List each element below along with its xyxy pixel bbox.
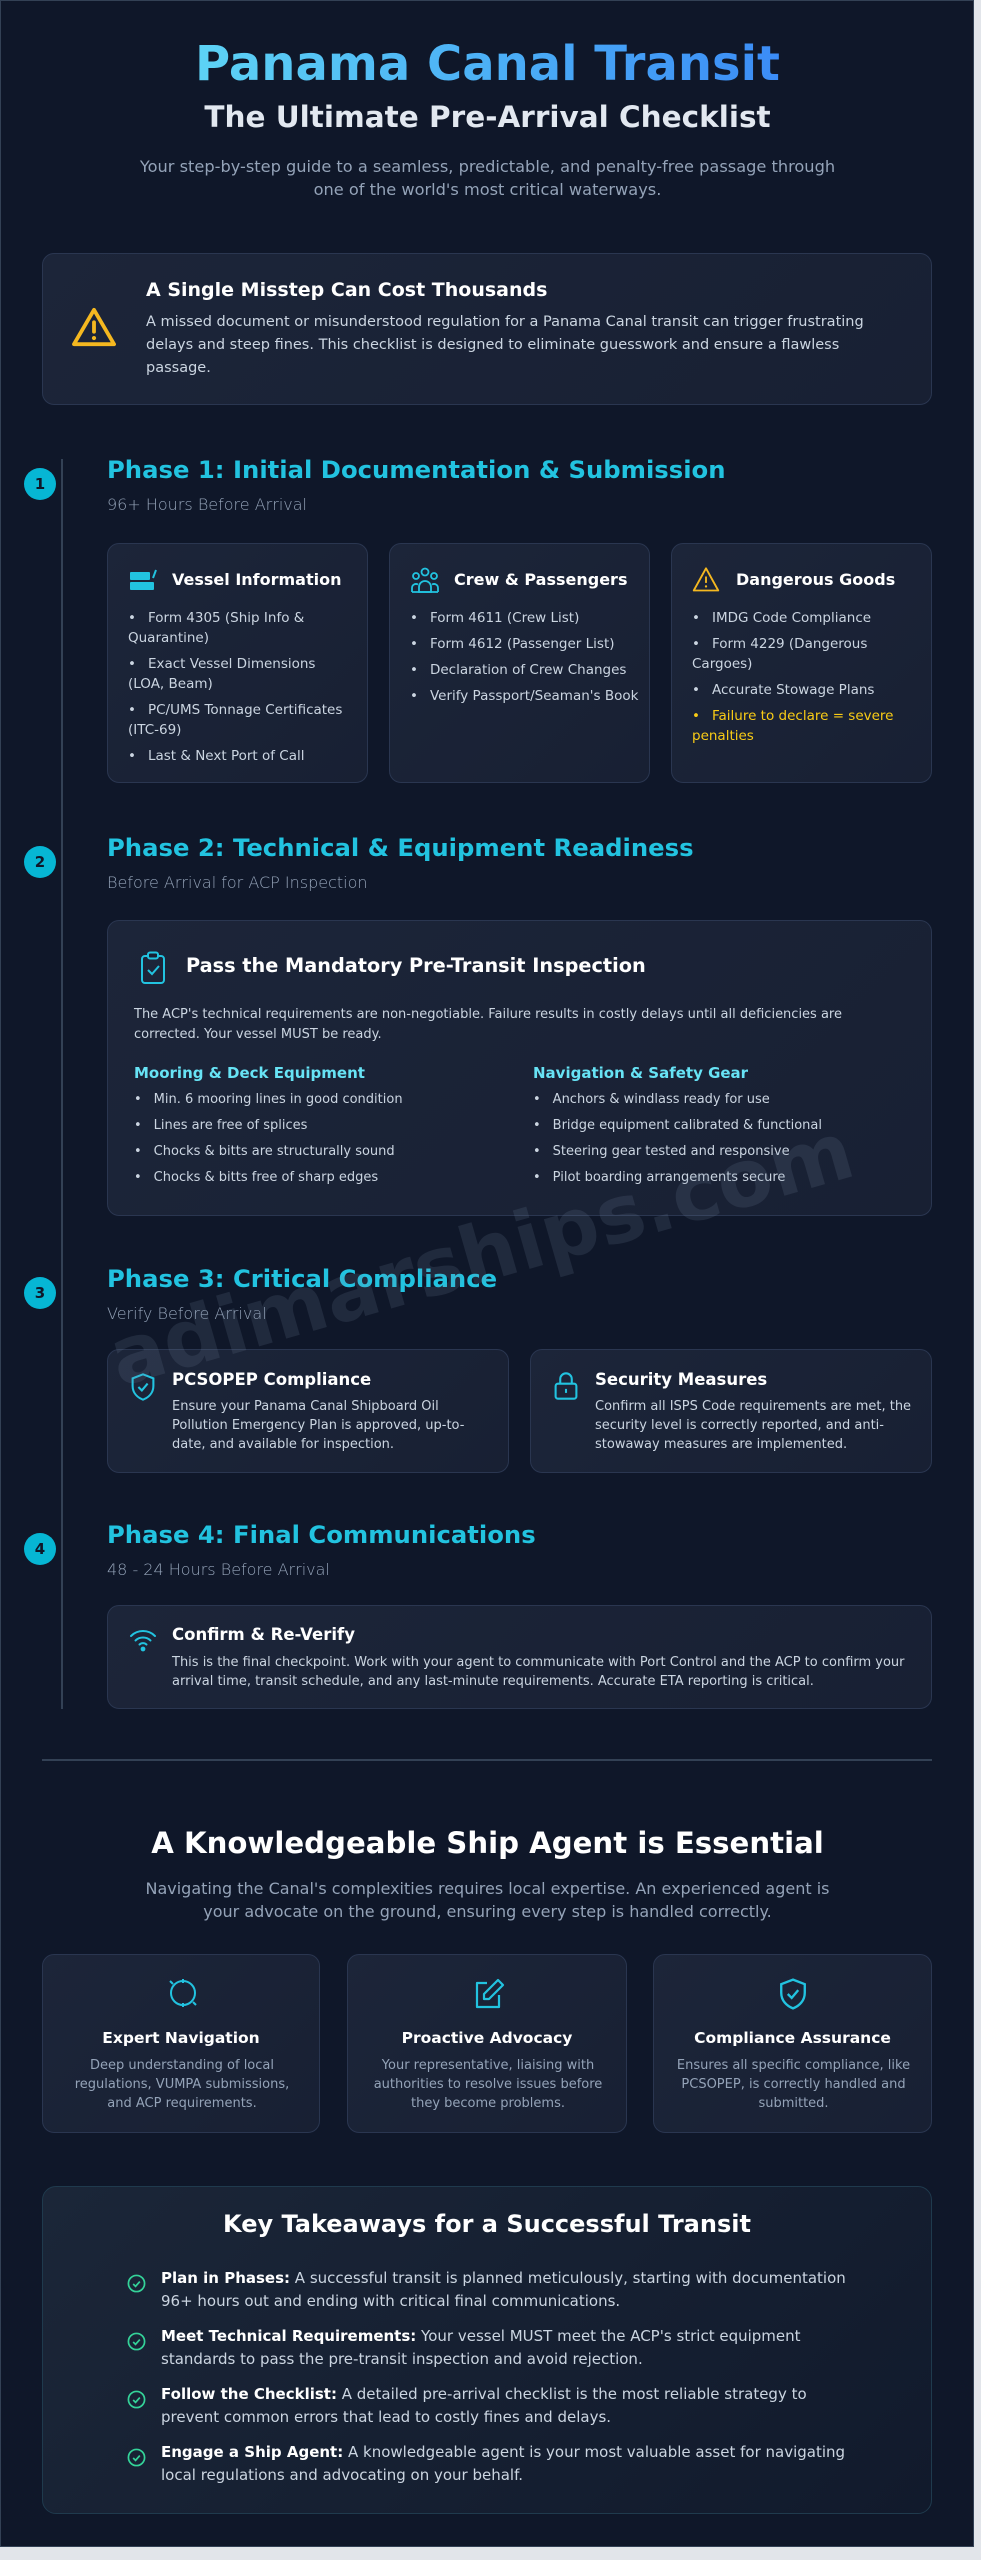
- column: navigation: Navigation & Safety Gear: [533, 1064, 748, 1082]
- badge 2: [24, 846, 56, 878]
- warning text: A missed document or misunderstood regulation for a Panama Canal transit can trigger frustrating delays and steep fines. This checklist is designed to eliminate guesswork and ensure a flawless passage.: [146, 314, 864, 376]
- list: IMDG Code Compliance: [712, 610, 871, 626]
- badge 1: 1: [35, 475, 45, 493]
- card: pcsopep: [107, 1349, 509, 1473]
- column: navigation: Bridge equipment calibrated & functional: [553, 1118, 822, 1133]
- title: Dangerous Goods: [736, 570, 895, 589]
- list: [412, 610, 638, 704]
- card: proactive advocacy: [347, 1954, 627, 2133]
- card: confirm: [107, 1605, 932, 1709]
- column: mooring: Chocks & bitts are structurally sound: [154, 1144, 395, 1159]
- card: vessel information: [107, 543, 368, 783]
- phase 2 subtitle: Before Arrival for ACP Inspection: [107, 873, 368, 892]
- icon: clipboard: [141, 952, 165, 984]
- list: Form 4611 (Crew List): [430, 610, 579, 626]
- title: PCSOPEP Compliance: [172, 1370, 371, 1389]
- phase 2: [24, 833, 694, 892]
- icon: shield: [132, 1373, 154, 1401]
- column: mooring: Min. 6 mooring lines in good condition: [154, 1092, 403, 1107]
- title: Panama Canal Transit: [195, 36, 780, 92]
- list: Exact Vessel Dimensions (LOA, Beam): [128, 656, 315, 692]
- column: navigation: Steering gear tested and responsive: [553, 1144, 790, 1159]
- column: mooring: [134, 1064, 403, 1185]
- card: compliance assurance: [653, 1954, 932, 2133]
- list: Form 4612 (Passenger List): [430, 636, 614, 652]
- list: Form 4229 (Dangerous Cargoes): [692, 636, 867, 672]
- text: Ensure your Panama Canal Shipboard Oil Pollution Emergency Plan is approved, up-to-date, and available for inspection.: [172, 1399, 464, 1452]
- list: PC/UMS Tonnage Certificates (ITC-69): [128, 702, 342, 738]
- phase 3: [24, 1264, 497, 1323]
- intro text: The ACP's technical requirements are non-negotiable. Failure results in costly delays until all deficiencies are corrected. Your vessel MUST be ready.: [134, 1007, 842, 1042]
- list: Last & Next Port of Call: [148, 748, 304, 764]
- column: mooring: Mooring & Deck Equipment: [134, 1064, 365, 1082]
- phase 1: [24, 455, 726, 514]
- list: [692, 610, 894, 744]
- card: crew & passengers: [389, 543, 650, 783]
- title: Vessel Information: [172, 570, 341, 589]
- list: Form 4305 (Ship Info & Quarantine): [128, 610, 304, 646]
- phase 4: [24, 1520, 536, 1579]
- badge 4: [24, 1533, 56, 1565]
- title: Pass the Mandatory Pre-Transit Inspection: [186, 954, 646, 977]
- column: mooring: Lines are free of splices: [154, 1118, 307, 1133]
- icon: people: [411, 568, 439, 593]
- panel: key takeaways: [42, 2186, 932, 2514]
- list: [128, 610, 342, 764]
- agent subtext: Navigating the Canal's complexities requires local expertise. An experienced agent is your advocate on the ground, ensuring every step is handled correctly.: [145, 1879, 830, 1921]
- watermark: adimarships.com: [99, 1104, 863, 1405]
- phase 4 subtitle: 48 - 24 Hours Before Arrival: [107, 1560, 330, 1579]
- warning heading: A Single Misstep Can Cost Thousands: [146, 279, 547, 301]
- item 3: Follow the Checklist: A detailed pre-arrival checklist is the most reliable strategy to prevent common errors that lead to costly fines and delays.: [161, 2385, 807, 2426]
- column: navigation: [533, 1064, 822, 1185]
- card: dangerous goods: [671, 543, 932, 783]
- phase 2 heading: Phase 2: Technical & Equipment Readiness: [107, 833, 694, 862]
- icon: warning: [72, 308, 116, 346]
- card: security: [530, 1349, 932, 1473]
- callout: warning: [42, 253, 932, 405]
- panel: inspection: [107, 920, 932, 1216]
- text: Deep understanding of local regulations, VUMPA submissions, and ACP requirements.: [75, 2058, 289, 2111]
- phase 3 heading: Phase 3: Critical Compliance: [107, 1264, 497, 1293]
- title: Security Measures: [595, 1370, 767, 1389]
- icon: ship: [130, 570, 157, 590]
- badge 3: 3: [35, 1284, 45, 1302]
- divider: [42, 1759, 932, 1761]
- phase 1 heading: Phase 1: Initial Documentation & Submission: [107, 455, 726, 484]
- text: This is the final checkpoint. Work with your agent to communicate with Port Control and the ACP to confirm your arrival time, transit schedule, and any last-minute requirements. Accurate ETA reporting is critical.: [172, 1655, 905, 1689]
- item 2: Meet Technical Requirements: Your vessel MUST meet the ACP's strict equipment standards to pass the pre-transit inspection and avoid rejection.: [161, 2327, 801, 2368]
- list: Declaration of Crew Changes: [430, 662, 626, 678]
- title: Crew & Passengers: [454, 570, 627, 589]
- item 4: Engage a Ship Agent: A knowledgeable agent is your most valuable asset for navigating local regulations and advocating on your behalf.: [161, 2443, 845, 2484]
- item 1: Plan in Phases: A successful transit is planned meticulously, starting with documentation 96+ hours out and ending with critical final communications.: [161, 2269, 846, 2310]
- badge 3: [24, 1277, 56, 1309]
- icon: pencil: [476, 1978, 504, 2008]
- badge 2: 2: [35, 853, 45, 871]
- icon: warning: [692, 567, 720, 592]
- text: Ensures all specific compliance, like PCSOPEP, is correctly handled and submitted.: [677, 2058, 910, 2111]
- list: Failure to declare = severe penalties: [692, 708, 894, 744]
- title: Confirm & Re-Verify: [172, 1625, 355, 1644]
- title: Compliance Assurance: [694, 2029, 891, 2047]
- icon: signal: [130, 1630, 156, 1652]
- icon: compass: [169, 1979, 197, 2007]
- text: Your representative, liaising with authorities to resolve issues before they become problems.: [374, 2058, 602, 2111]
- title: Expert Navigation: [102, 2029, 260, 2047]
- takeaways heading: Key Takeaways for a Successful Transit: [223, 2210, 751, 2238]
- agent heading: A Knowledgeable Ship Agent is Essential: [151, 1826, 824, 1860]
- badge 4: 4: [35, 1540, 45, 1558]
- badge 1: [24, 468, 56, 500]
- subtitle: The Ultimate Pre-Arrival Checklist: [204, 100, 771, 134]
- takeaway list: [128, 2269, 846, 2484]
- card: expert navigation: [42, 1954, 320, 2133]
- text: Confirm all ISPS Code requirements are met, the security level is correctly reported, and anti-stowaway measures are implemented.: [595, 1399, 911, 1452]
- icon: lock: [554, 1372, 578, 1400]
- column: navigation: Anchors & windlass ready for use: [553, 1092, 770, 1107]
- list: Verify Passport/Seaman's Book: [430, 688, 638, 704]
- column: navigation: Pilot boarding arrangements secure: [553, 1170, 785, 1185]
- phase 1 subtitle: 96+ Hours Before Arrival: [107, 495, 307, 514]
- column: mooring: Chocks & bitts free of sharp edges: [154, 1170, 378, 1185]
- phase 3 subtitle: Verify Before Arrival: [107, 1304, 267, 1323]
- icon: shield check: [780, 1978, 806, 2010]
- tagline: Your step-by-step guide to a seamless, predictable, and penalty-free passage through one of the world's most critical waterways.: [140, 157, 835, 199]
- timeline line: [61, 459, 63, 1709]
- title: Proactive Advocacy: [402, 2029, 572, 2047]
- list: Accurate Stowage Plans: [712, 682, 874, 698]
- phase 4 heading: Phase 4: Final Communications: [107, 1520, 536, 1549]
